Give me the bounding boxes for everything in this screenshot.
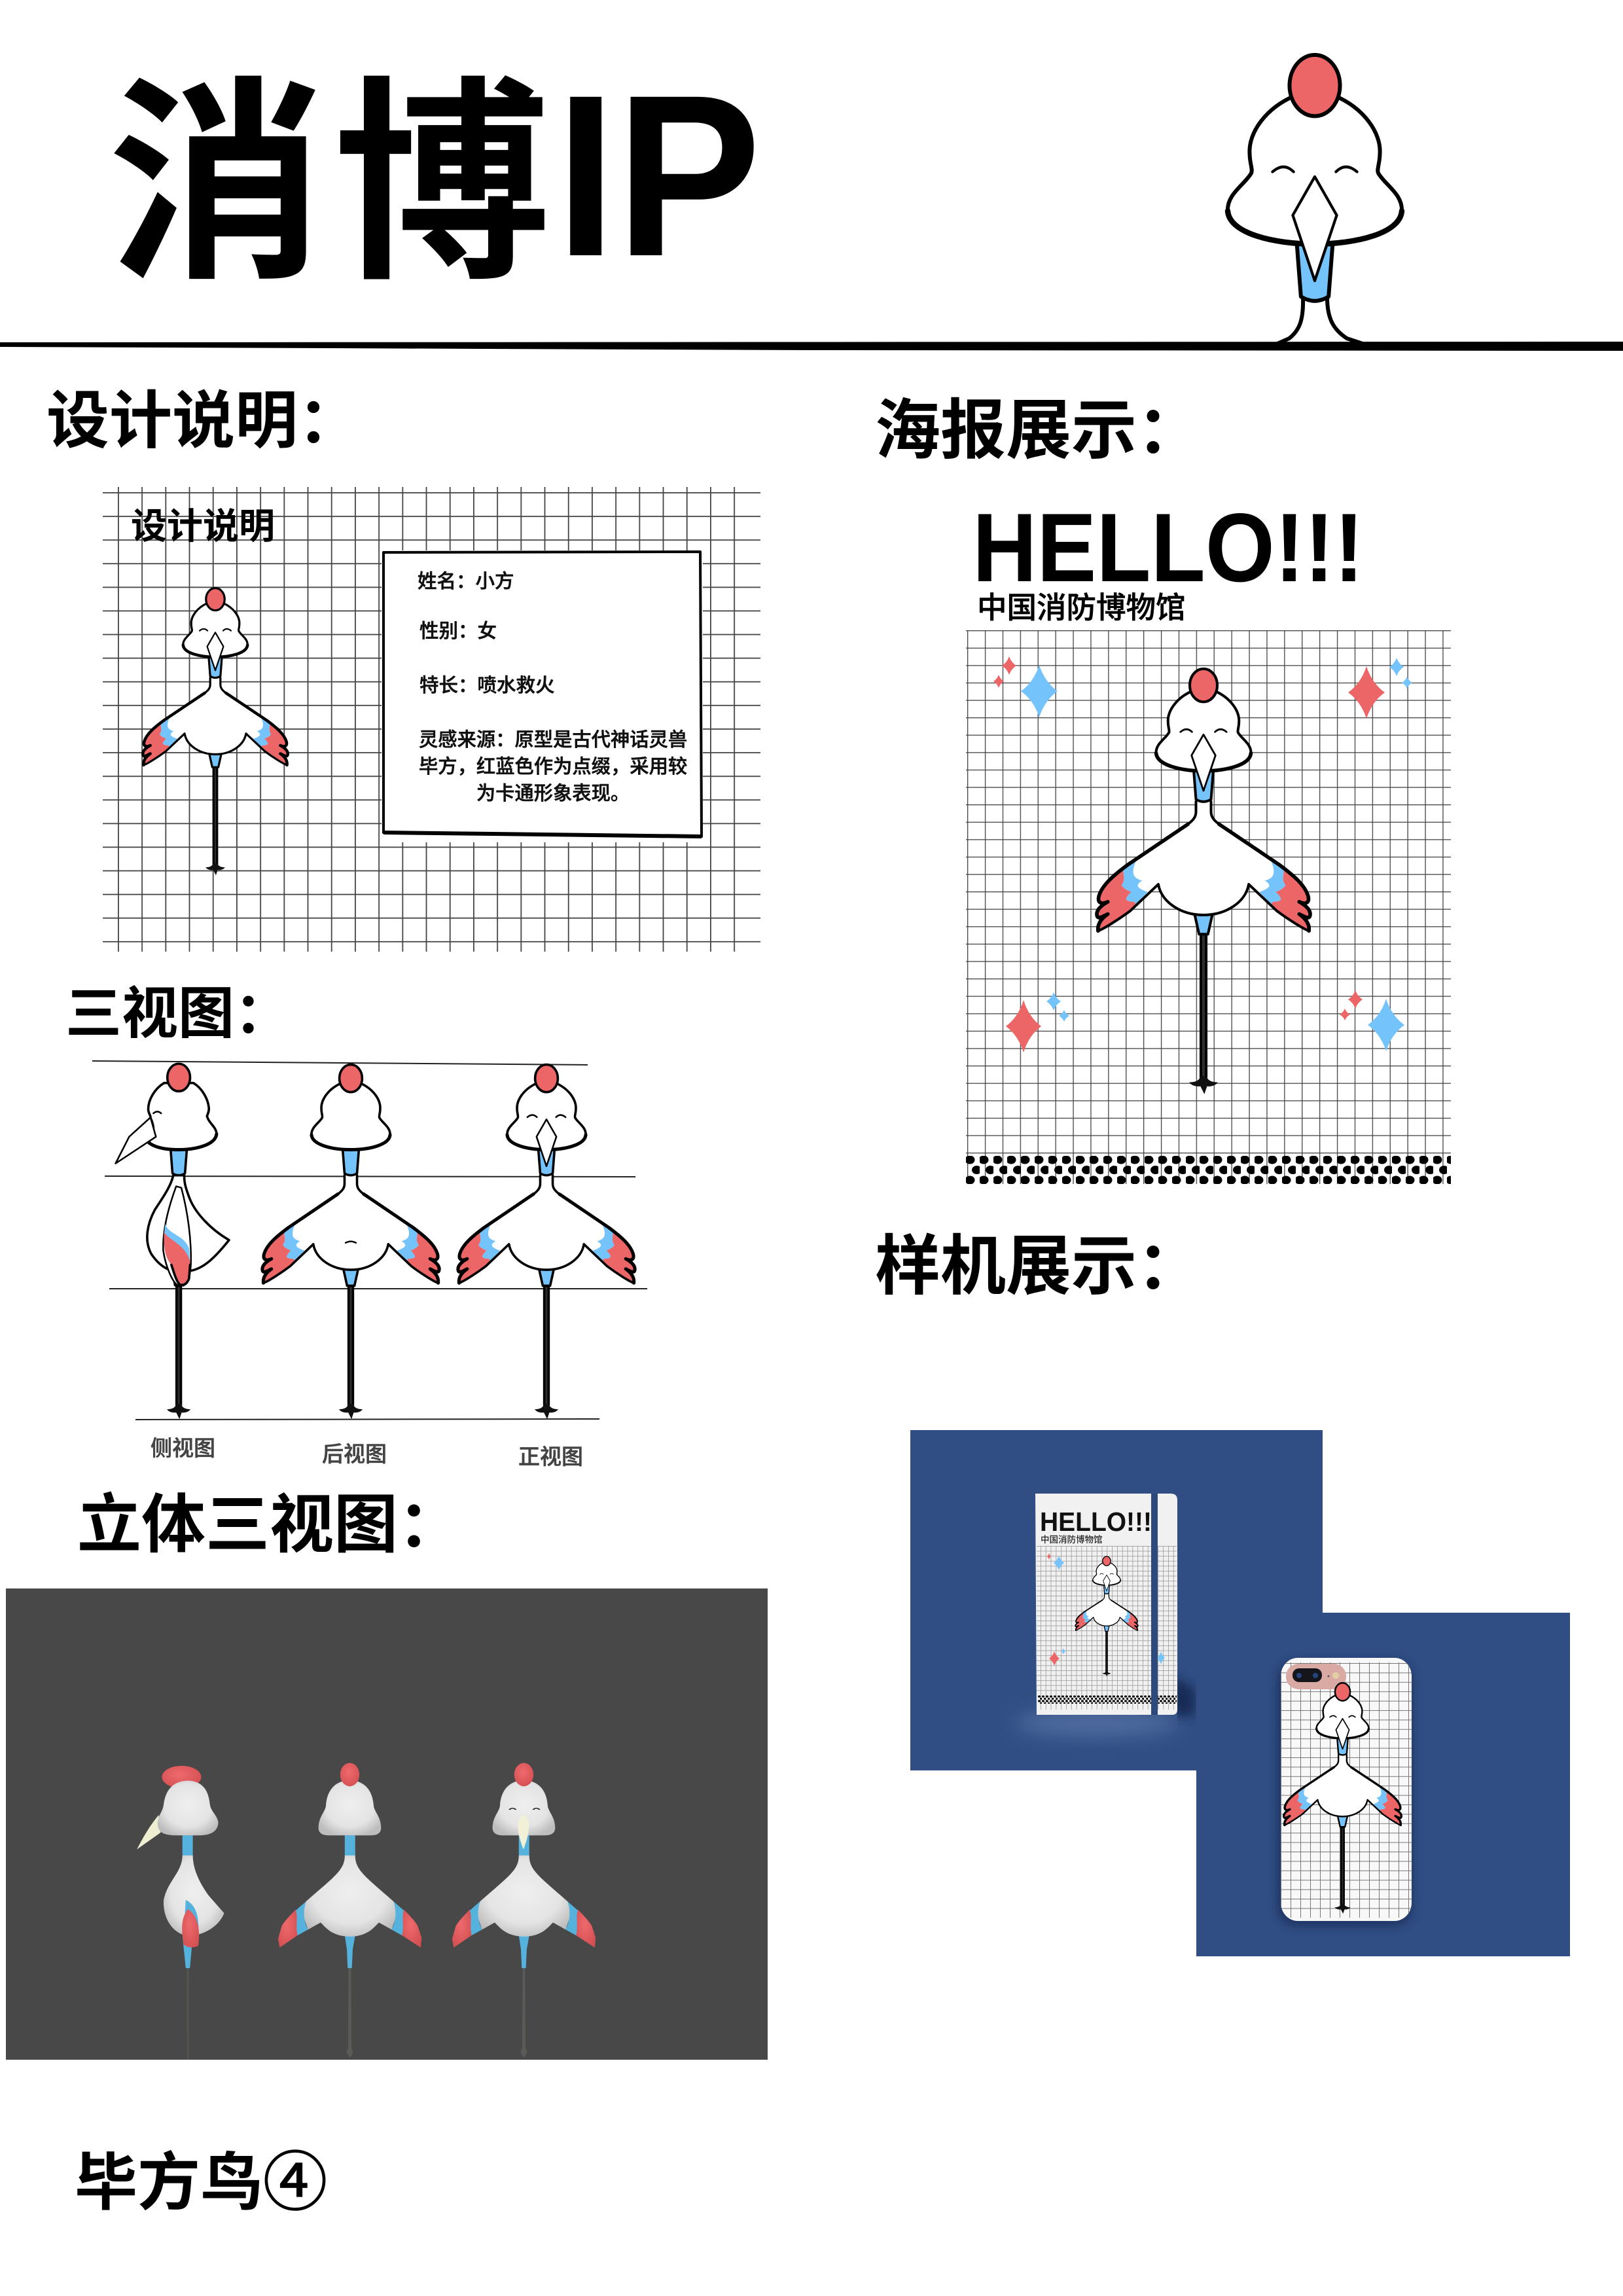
3D front view xyxy=(452,1763,596,2058)
title rule xyxy=(0,342,1623,351)
heading: poster: 海报展示： xyxy=(875,394,1202,467)
notebook cover: HELLO!!! xyxy=(1040,1507,1152,1537)
footer label: 毕方鸟④ xyxy=(75,2130,327,2223)
3D side view xyxy=(137,1766,224,2059)
info card: 特长：喷水救火 xyxy=(419,675,555,696)
phone case xyxy=(1281,1658,1412,1921)
info card: 灵感来源：原型是古代神话灵兽 xyxy=(419,729,687,751)
camera bump xyxy=(1286,1664,1346,1689)
poster grid xyxy=(966,630,1451,1184)
info card: 性别：女 xyxy=(419,620,497,642)
chart: three-view turnaround xyxy=(92,1061,647,1469)
heading: mockups: 样机展示： xyxy=(875,1230,1202,1303)
notebook cover xyxy=(1035,1494,1177,1715)
heading: 3D three views: 立体三视图： xyxy=(77,1488,462,1560)
panel: 3D render xyxy=(6,1588,768,2060)
side view mascot xyxy=(116,1064,229,1419)
heading: three views: 三视图： xyxy=(65,982,291,1045)
heading: design notes: 设计说明： xyxy=(46,386,361,456)
info card xyxy=(382,550,703,842)
panel: notebook mockup xyxy=(910,1430,1323,1770)
label: side view: 侧视图 xyxy=(151,1436,215,1460)
info card: 毕方，红蓝色作为点缀，采用较 xyxy=(419,756,687,778)
title: 消博 xyxy=(108,64,560,306)
notebook shadow and glow xyxy=(1015,1676,1195,1736)
panel: design notes xyxy=(103,487,760,952)
3D back view xyxy=(278,1763,421,2058)
poster subtitle: 中国消防博物馆 xyxy=(977,591,1186,624)
title: IP xyxy=(556,46,761,304)
panel: phone case mockup xyxy=(1196,1613,1570,1956)
title xyxy=(108,46,761,306)
label: back view: 后视图 xyxy=(322,1442,387,1466)
poster mascot xyxy=(1097,669,1310,1094)
notebook cover: 中国消防博物馆 xyxy=(1041,1534,1102,1545)
label: front view: 正视图 xyxy=(518,1444,583,1469)
sparkles xyxy=(993,656,1412,1052)
panel: poster xyxy=(966,493,1451,1184)
mascot front view xyxy=(143,588,288,875)
info card: 为卡通形象表现。 xyxy=(476,783,630,804)
info card: 姓名：小方 xyxy=(418,571,514,592)
back view mascot xyxy=(262,1065,439,1419)
poster headline: HELLO!!! xyxy=(972,493,1364,602)
panel heading: 设计说明 xyxy=(131,506,275,547)
icon: mascot standing on the title rule xyxy=(1228,55,1402,344)
front view mascot xyxy=(458,1065,635,1419)
